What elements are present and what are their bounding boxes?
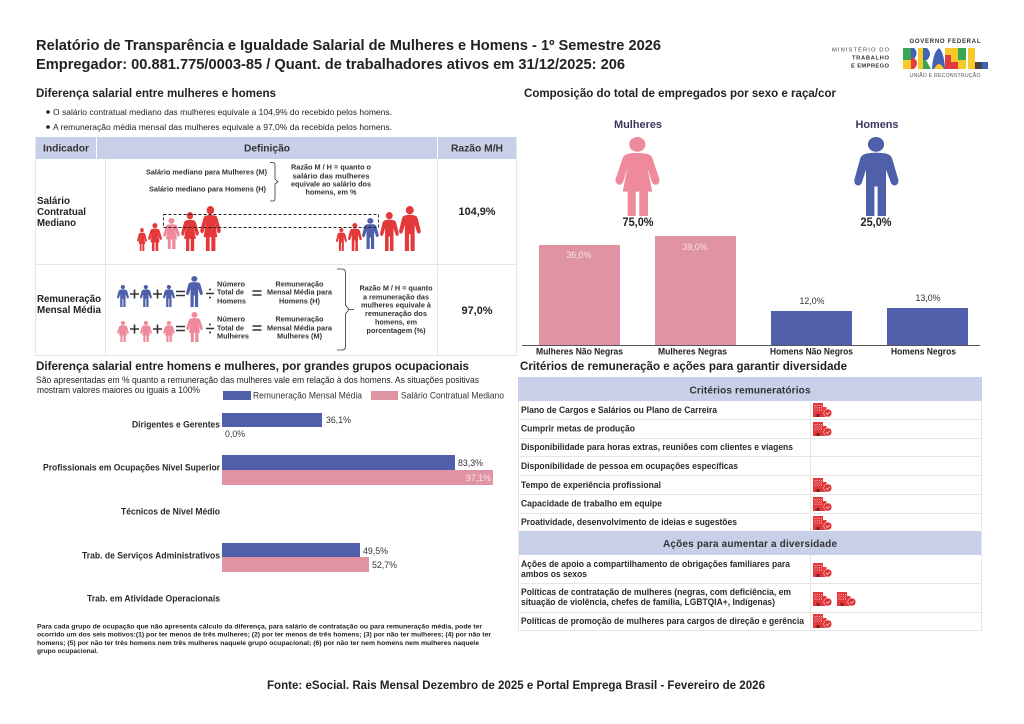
formula: men average: Remuneração [276, 282, 324, 289]
description text: São apresentadas em % quanto a remuneração das mulheres vale em relação à dos homens. As situações positivas [36, 375, 480, 385]
logo: Governo Federal Brasil [903, 39, 988, 79]
logo: Ministério do Trabalho e Emprego: E EMPREGO [851, 64, 889, 70]
actions list: situação de violência, chefes de família, LGBTQIA+, Indígenas) [521, 597, 775, 607]
definition text: razão remuneração: a remuneração das [363, 295, 429, 302]
logo: Ministério do Trabalho e Emprego [832, 46, 889, 70]
bar chart: sexo e raça/cor: 13,0% [916, 293, 941, 303]
row label: remuneração mensal média [37, 294, 101, 316]
definition text: salário mediano: equivale ao salário dos [291, 181, 371, 188]
formula: women average: Mulheres [217, 334, 249, 341]
value labels: 97,1% [466, 473, 491, 483]
definition text: razão remuneração: Razão M / H = quanto [360, 286, 432, 293]
bar chart: sexo e raça/cor: 12,0% [800, 296, 825, 306]
pictogram: mulheres 75,0%: Mulheres [614, 119, 662, 131]
actions list: ambos os sexos [521, 569, 587, 579]
pictogram: mulheres 75,0%: 75,0% [622, 217, 654, 229]
logo: Governo Federal Brasil: UNIÃO E RECONSTRUÇÃO [910, 72, 980, 79]
value: 97,0%: 97,0% [462, 305, 493, 317]
actions list: Políticas de contratação de mulheres (negras, com deficiência, em [521, 587, 791, 597]
category labels: Profissionais em Ocupações Nível Superior [43, 462, 221, 472]
icons: actions adopted [813, 563, 856, 628]
criteria list: Capacidade de trabalho em equipe [521, 498, 662, 508]
category labels [43, 420, 221, 604]
source line: Fonte: eSocial. Rais Mensal Dezembro de 2025 e Portal Emprega Brasil - Fevereiro de 2026 [267, 678, 765, 692]
definition text: razão remuneração: remuneração dos [365, 311, 427, 318]
footnote: homens; (5) por não ter três homens nem três mulheres naquele grupo ocupacional; (6) por não ter nem homens nem mulheres naquele [37, 640, 479, 647]
formula: men average: Homens [217, 298, 246, 305]
pictogram: mulheres 75,0% [614, 119, 662, 229]
table header row: Definição [244, 144, 290, 154]
value: 104,9%: 104,9% [458, 206, 496, 218]
table header row: Razão M/H [451, 144, 503, 154]
bullet list: A remuneração média mensal das mulheres equivale a 97,0% da recebida pelos homens. [53, 122, 392, 132]
bullet list [46, 107, 392, 132]
formula: women average [117, 312, 332, 342]
criteria list: Disponibilidade de pessoa em ocupações específicas [521, 461, 738, 471]
description text: mostram valores maiores ou iguais a 100% [37, 385, 200, 395]
logo: Ministério do Trabalho e Emprego: MINISTÉRIO DO [832, 46, 889, 54]
icons: criteria adopted [813, 403, 832, 530]
section header: ações para diversidade: Ações para aumentar a diversidade [663, 539, 837, 550]
criteria list: Cumprir metas de produção [521, 424, 636, 434]
definition text: razão remuneração [337, 269, 432, 350]
definition text: razão remuneração: homens, em [375, 320, 417, 327]
value labels: 49,5% [363, 546, 388, 556]
row label: salário contratual mediano [37, 196, 86, 229]
legend [223, 390, 504, 400]
row label: salário contratual mediano: Contratual [37, 207, 86, 218]
panel: indicator table [35, 137, 517, 356]
formula: men average: Homens (H) [279, 298, 320, 305]
title: Empregador: 00.881.775/0003-85 / Quant. de trabalhadores ativos em 31/12/2025: 206 [36, 57, 625, 73]
legend: Remuneração Mensal Média [253, 390, 363, 400]
logo: Ministério do Trabalho e Emprego: TRABALHO [852, 56, 889, 62]
heading: composição: Composição do total de empregados por sexo e raça/cor [524, 86, 836, 100]
title [36, 38, 661, 73]
pictogram: homens 25,0%: 25,0% [860, 217, 892, 229]
row label: salário contratual mediano: Salário [37, 196, 70, 207]
formula: women average: Remuneração [276, 316, 324, 323]
title: Relatório de Transparência e Igualdade Salarial de Mulheres e Homens - 1º Semestre 2026 [36, 38, 661, 54]
formula: women average: Mulheres (M) [277, 334, 322, 341]
criteria list: Tempo de experiência profissional [521, 480, 661, 490]
icon: median men group [336, 206, 421, 251]
table header row [43, 144, 503, 154]
bar chart: sexo e raça/cor: Mulheres Não Negras [536, 346, 623, 356]
definition text: salário mediano: Razão M / H = quanto o [291, 165, 371, 172]
criteria list [521, 405, 793, 527]
footnote [37, 624, 491, 655]
section header: critérios remuneratórios: Critérios remuneratórios [690, 386, 811, 396]
value labels: 52,7% [372, 560, 397, 570]
table header row: Indicador [43, 144, 89, 154]
value labels: 83,3% [458, 458, 483, 468]
value labels: 0,0% [225, 429, 245, 439]
footnote: Para cada grupo de ocupação que não apresenta cálculo da diferença, para salário de contratação ou para remuneração média, pode ter [37, 624, 482, 630]
bar chart: sexo e raça/cor: 36,0% [566, 250, 592, 260]
pictogram: homens 25,0% [854, 119, 898, 229]
definition text: salário mediano: Salário mediano para Mulheres (M) [146, 170, 267, 177]
category labels: Dirigentes e Gerentes [132, 420, 220, 430]
category labels: Técnicos de Nível Médio [121, 506, 221, 516]
formula: women average: Mensal Média para [267, 325, 332, 332]
heading: critérios: Critérios de remuneração e ações para garantir diversidade [520, 359, 847, 373]
bar chart: grupos ocupacionais [43, 413, 493, 604]
legend: Salário Contratual Mediano [401, 390, 504, 400]
formula: men average [117, 276, 332, 307]
bar chart: sexo e raça/cor [522, 236, 980, 356]
definition text: salário mediano: salário das mulheres [292, 173, 370, 180]
description text [36, 375, 480, 395]
formula: men average: Total de [217, 290, 244, 297]
heading: diferença por grupos ocupacionais: Diferença salarial entre homens e mulheres, por grandes grupos ocupacionais [36, 359, 469, 373]
definition text: razão remuneração: porcentagem (%) [366, 328, 426, 335]
value labels [225, 415, 491, 570]
row label: remuneração mensal média: Remuneração [37, 294, 101, 305]
formula: women average: Total de [217, 325, 244, 332]
dashed median comparison box [164, 214, 378, 228]
bar chart: sexo e raça/cor: 39,0% [682, 242, 708, 252]
logo: Governo Federal Brasil: GOVERNO FEDERAL [910, 39, 981, 45]
definition text: salário mediano: homens, em % [306, 190, 356, 197]
actions list: Políticas de promoção de mulheres para cargos de direção e gerência [521, 616, 804, 626]
definition text: salário mediano: Salário mediano para Homens (H) [149, 186, 266, 193]
panel: critérios table [518, 377, 982, 630]
bar chart: sexo e raça/cor: Homens Não Negros [770, 346, 853, 356]
definition text: razão remuneração: mulheres equivale à [361, 303, 431, 310]
value labels: 36,1% [326, 415, 351, 425]
definition text: salário mediano [146, 162, 371, 201]
formula: men average: Número [217, 282, 245, 289]
heading: diferença salarial: Diferença salarial entre mulheres e homens [36, 86, 276, 100]
category labels: Trab. em Atividade Operacionais [87, 594, 220, 604]
actions list [521, 559, 804, 626]
category labels: Trab. de Serviços Administrativos [82, 550, 220, 560]
row label: salário contratual mediano: Mediano [37, 218, 76, 229]
row label: remuneração mensal média: Mensal Média [37, 305, 101, 316]
formula: men average: Mensal Média para [267, 290, 332, 297]
footnote: ocorrido um dos seis motivos:(1) por ter menos de três mulheres; (2) por ter menos de três homens; (3) por não ter mulheres; (4) por não ter [37, 632, 491, 638]
bar chart: sexo e raça/cor: Homens Negros [891, 346, 956, 356]
bar chart: sexo e raça/cor: Mulheres Negras [658, 346, 727, 356]
actions list: Ações de apoio a compartilhamento de obrigações familiares para [521, 559, 790, 569]
criteria list: Proatividade, desenvolvimento de ideias e sugestões [521, 517, 737, 527]
formula: women average: Número [217, 316, 245, 323]
icon: median women group [137, 206, 221, 251]
pictogram: homens 25,0%: Homens [856, 119, 898, 131]
criteria list: Plano de Cargos e Salários ou Plano de Carreira [521, 405, 717, 415]
footnote: grupo ocupacional. [37, 648, 98, 655]
bullet list: O salário contratual mediano das mulheres equivale a 104,9% do recebido pelos homens. [53, 107, 392, 117]
bars [222, 413, 493, 572]
criteria list: Disponibilidade para horas extras, reuniões com clientes e viagens [521, 442, 793, 452]
